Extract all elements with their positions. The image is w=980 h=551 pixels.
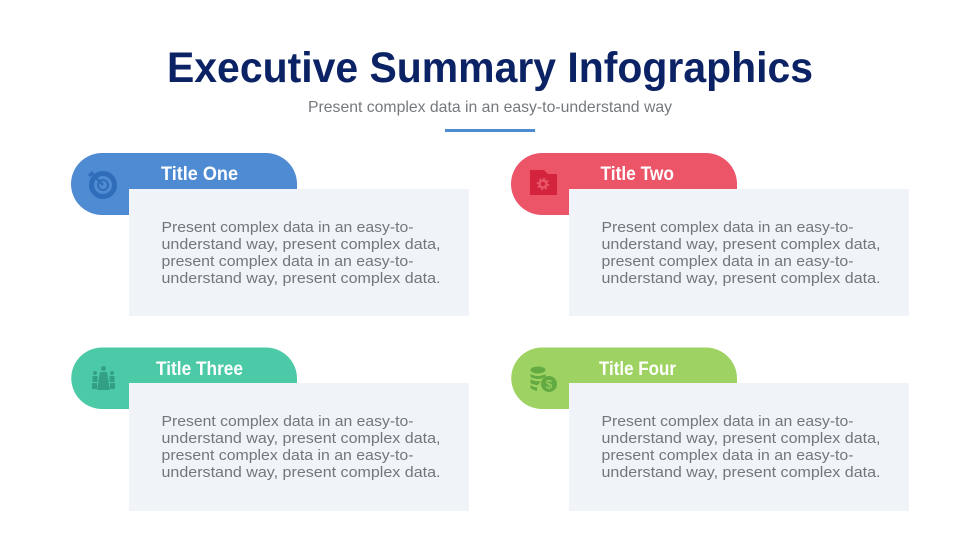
heading: title one: Title One [161, 164, 238, 185]
text card: title one: present complex data in an easy-to- [162, 253, 414, 270]
subtitle: Present complex data in an easy-to-understand way [308, 99, 672, 116]
icon: coins with dollar [530, 366, 557, 392]
text card: title two: present complex data in an easy-to- [602, 253, 854, 270]
panel: title three [71, 348, 469, 511]
title: Executive Summary Infographics [167, 44, 813, 92]
text card: title two: understand way, present complex data, [602, 236, 880, 253]
panel: title two [511, 153, 909, 316]
text card: title one: understand way, present complex data, [162, 236, 440, 253]
panel: title one [71, 153, 469, 316]
heading: title two: Title Two [600, 164, 674, 185]
icon: meeting table with people [92, 366, 115, 390]
heading: title three: Title Three [156, 359, 243, 380]
text card: title four: present complex data in an easy-to- [602, 447, 854, 464]
text card: title four: understand way, present complex data, [602, 430, 880, 447]
pill header: title one [71, 153, 297, 215]
pill header: title two [511, 153, 737, 215]
text card: title four: understand way, present complex data. [602, 464, 880, 481]
icon: folder with gear [530, 170, 557, 195]
text card: title one: Present complex data in an easy-to- [162, 219, 414, 236]
icon: coins with dollar: $ [546, 378, 553, 392]
text card: title four [569, 383, 909, 511]
text card: title three: Present complex data in an easy-to- [162, 413, 414, 430]
text card: title two: Present complex data in an easy-to- [602, 219, 854, 236]
text card: title three [129, 383, 469, 511]
title underline accent [445, 129, 535, 132]
text card: title one [129, 189, 469, 316]
text card: title four: Present complex data in an easy-to- [602, 413, 854, 430]
text card: title one: understand way, present complex data. [162, 270, 440, 287]
text card: title two: understand way, present complex data. [602, 270, 880, 287]
heading: title four: Title Four [599, 359, 677, 380]
icon: target with arrow [89, 172, 114, 196]
text card: title three: understand way, present complex data. [162, 464, 440, 481]
text card: title three: understand way, present complex data, [162, 430, 440, 447]
pill header: title four [511, 348, 737, 409]
pill header: title three [71, 348, 297, 409]
panel: title four [511, 348, 909, 511]
text card: title two [569, 189, 909, 316]
text card: title three: present complex data in an easy-to- [162, 447, 414, 464]
